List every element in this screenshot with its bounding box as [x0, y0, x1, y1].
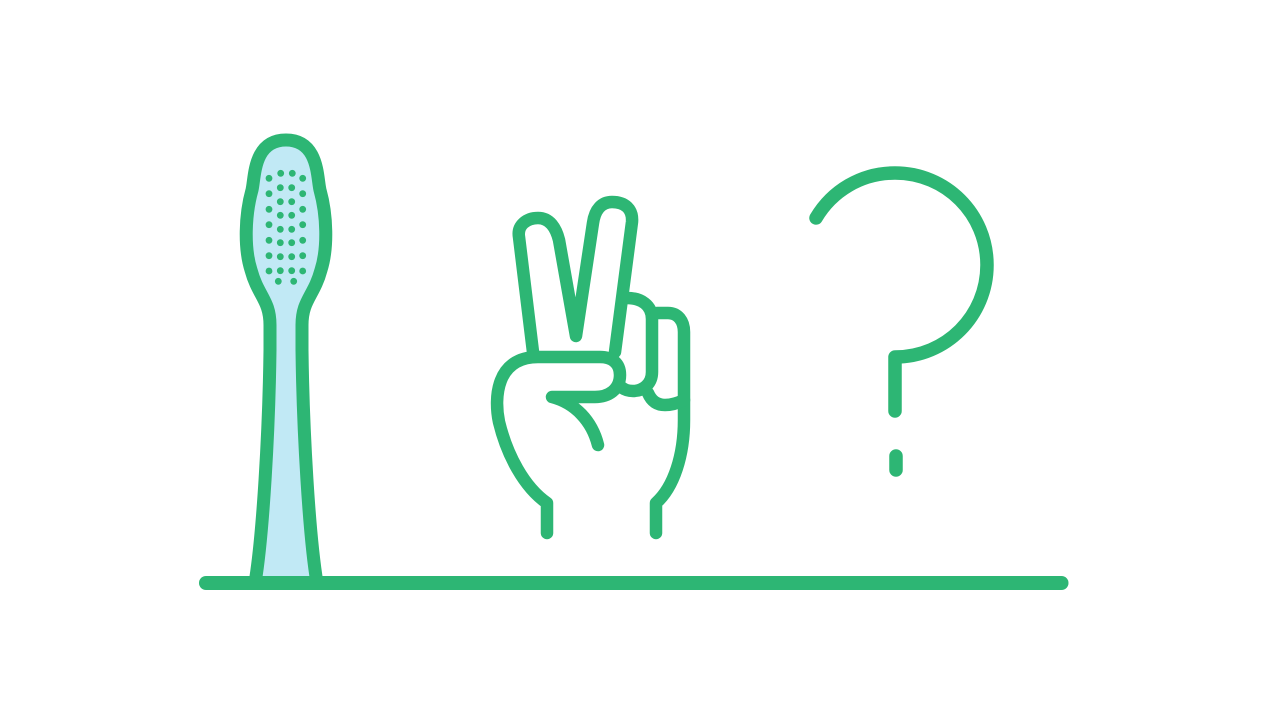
icon: toothbrush: [246, 140, 326, 583]
ring finger: [621, 298, 652, 391]
question mark dot: [889, 456, 903, 470]
folded thumb and palm: [497, 357, 620, 533]
question mark hook: [816, 173, 987, 411]
little finger and wrist: [656, 313, 684, 533]
icon: question mark: [816, 173, 987, 470]
toothbrush bristle dots: [266, 170, 306, 285]
index and middle fingers: [519, 202, 632, 352]
little finger base: [648, 393, 684, 405]
ground line: [206, 576, 1062, 590]
toothbrush outline: [246, 140, 326, 583]
icon: peace sign hand: [497, 202, 684, 533]
